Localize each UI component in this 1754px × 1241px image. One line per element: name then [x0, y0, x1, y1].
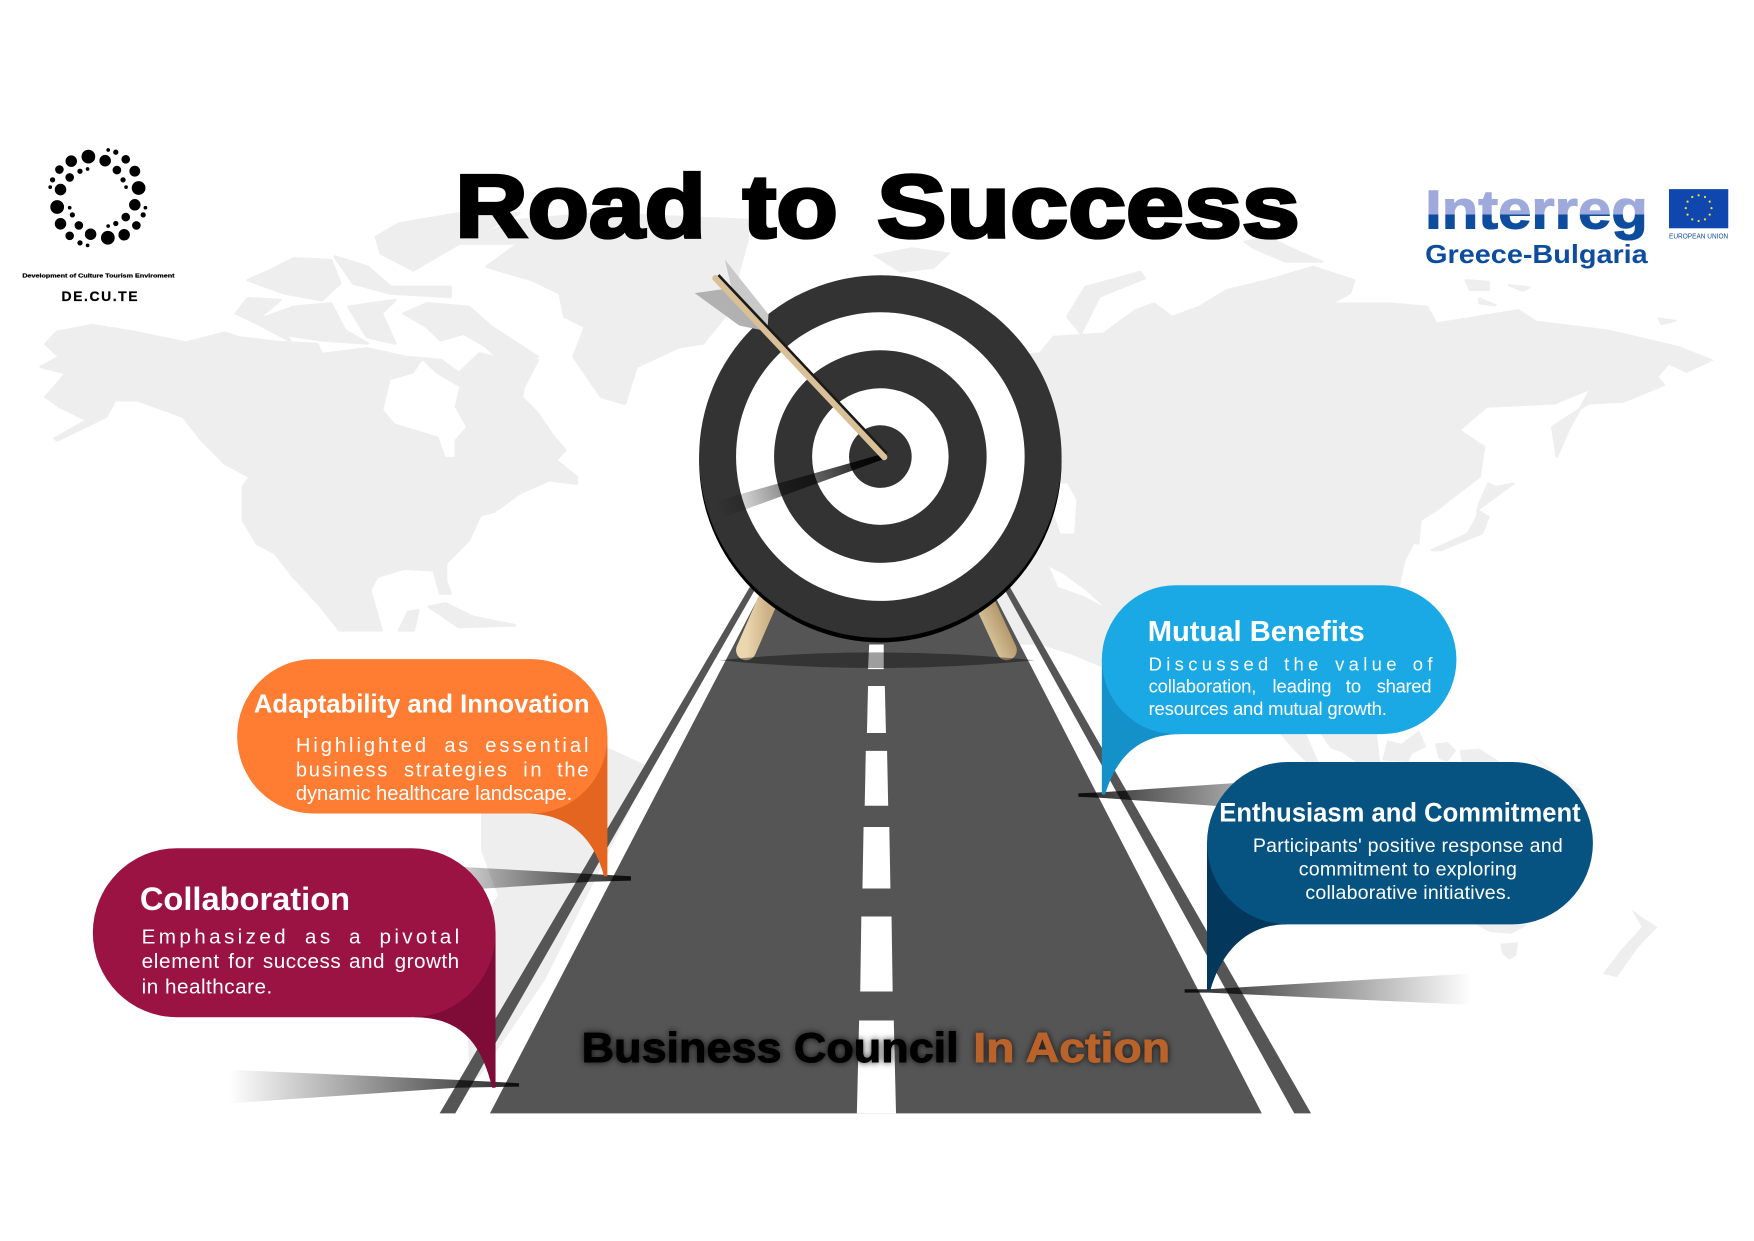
body text: Emphasized	[142, 925, 286, 948]
arrow	[695, 260, 886, 457]
body text: as	[444, 735, 468, 757]
callout: Collaboration	[93, 848, 496, 1088]
body text: element	[142, 950, 219, 973]
body text: collaboration,	[1149, 676, 1256, 697]
bubble body	[1207, 762, 1593, 924]
bubble tail	[526, 736, 607, 876]
arrow shaft	[718, 276, 886, 454]
road asphalt	[490, 593, 1262, 1113]
body text: commitment to exploring	[1299, 859, 1517, 881]
target	[699, 275, 1062, 642]
bubble tail	[1102, 660, 1180, 795]
body text: in healthcare.	[142, 976, 272, 999]
European Union label: EUROPEAN UNION	[1669, 233, 1728, 240]
road	[440, 587, 1311, 1113]
tail shadow: blue bubble	[1078, 775, 1342, 816]
bubble tail	[1207, 843, 1286, 990]
tail shadow: navy bubble	[1185, 974, 1471, 1005]
target black rim	[699, 280, 1062, 642]
road caption: In Action	[973, 1025, 1170, 1071]
body text	[296, 735, 589, 805]
icon: dotted ring	[49, 148, 147, 247]
tail shadow: maroon bubble	[229, 1070, 519, 1103]
target stand right leg	[986, 604, 1007, 650]
heading: Adaptability and Innovation	[254, 688, 590, 718]
body text	[142, 925, 459, 999]
body text: Highlighted	[296, 735, 426, 757]
logo: Interreg Greece-Bulgaria	[1425, 178, 1728, 269]
body text: value	[1335, 653, 1396, 674]
body text: collaborative initiatives.	[1305, 882, 1511, 904]
Southeast Asia, Australia and New Zealand	[1280, 730, 1658, 977]
title: to	[743, 156, 838, 256]
Interreg wordmark: Interreg	[1425, 178, 1648, 240]
South America	[464, 748, 649, 1085]
title: Road	[455, 156, 706, 256]
body text: the	[557, 760, 589, 782]
logo tagline: Development of Culture Tourism Enviroment	[22, 274, 175, 280]
body text: a	[349, 925, 361, 948]
world map background	[41, 213, 1712, 1085]
body text: of	[1413, 653, 1433, 674]
bubble body	[93, 848, 496, 1017]
arrow fletching lower	[695, 289, 767, 331]
title: Success	[877, 156, 1300, 256]
logo name: DE.CU.TE	[62, 288, 138, 304]
body text: essential	[485, 735, 589, 757]
callout: Adaptability and Innovation	[237, 659, 607, 876]
body text: strategies	[404, 760, 507, 782]
body text: as	[305, 925, 330, 948]
title	[455, 156, 1300, 256]
bubble body	[1102, 585, 1456, 734]
callout: Enthusiasm and Commitment	[1207, 762, 1593, 990]
body text: and	[349, 950, 384, 973]
callout: Mutual Benefits	[1102, 585, 1456, 795]
body text: for	[228, 950, 254, 973]
body text: resources and mutual growth.	[1149, 698, 1387, 719]
body text	[1149, 653, 1433, 719]
centre line dashes	[857, 645, 896, 1113]
road caption	[582, 1025, 1170, 1071]
target stand left leg	[746, 599, 768, 650]
arrow shadow	[711, 453, 885, 519]
bubble tail	[414, 932, 496, 1088]
heading: Enthusiasm and Commitment	[1219, 797, 1581, 827]
Eurasia and Africa	[972, 237, 1712, 667]
body text: growth	[395, 950, 459, 973]
body text: Discussed	[1149, 653, 1268, 674]
body text: success	[263, 950, 341, 973]
body text: pivotal	[380, 925, 459, 948]
body text: leading	[1273, 676, 1331, 697]
target ground shadow	[719, 652, 1035, 668]
heading: Collaboration	[140, 881, 350, 917]
body text: dynamic healthcare landscape.	[296, 783, 572, 805]
body text	[1253, 835, 1563, 904]
Greece-Bulgaria wordmark: Greece-Bulgaria	[1425, 241, 1648, 269]
body text: in	[523, 760, 542, 782]
body text: to	[1346, 676, 1361, 697]
body text: shared	[1377, 676, 1432, 697]
North America and Greenland	[41, 213, 747, 630]
body text: business	[296, 760, 387, 782]
heading: Mutual Benefits	[1148, 616, 1365, 648]
road right edge stripe	[1003, 587, 1311, 1113]
road caption: Business Council	[582, 1025, 959, 1071]
road left edge stripe	[440, 587, 756, 1113]
tail shadow: orange bubble	[414, 864, 631, 893]
bubble body	[237, 659, 607, 814]
arrow fletching upper	[725, 260, 768, 331]
body text: Participants' positive response and	[1253, 835, 1563, 857]
logo: DE.CU.TE	[22, 148, 175, 304]
body text: the	[1284, 653, 1318, 674]
Arctic island near the target	[873, 247, 951, 273]
icon: EU flag	[1669, 189, 1728, 228]
